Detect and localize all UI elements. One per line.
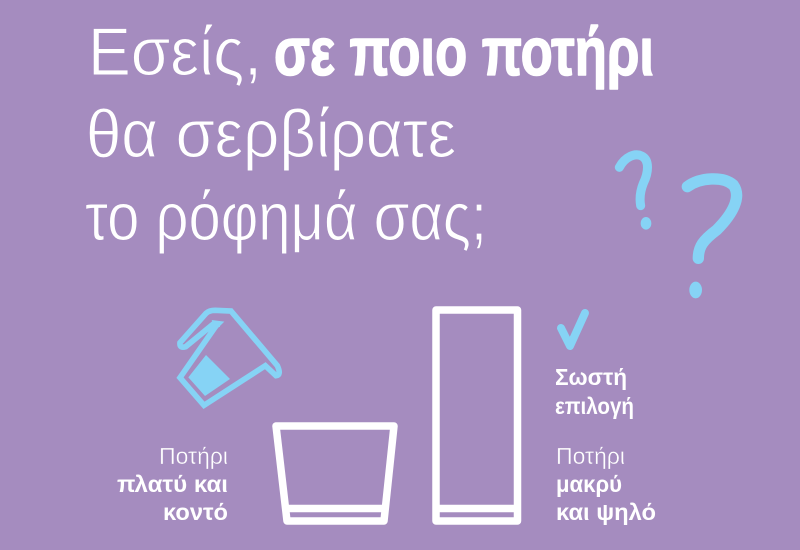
label: short glass: κοντό xyxy=(163,499,228,525)
label: short glass xyxy=(117,443,228,525)
label: tall glass: μακρύ xyxy=(556,471,622,497)
title: Εσείς, xyxy=(88,14,262,90)
icon: tall glass xyxy=(436,310,518,521)
icon: check mark xyxy=(561,313,585,346)
icon: small question mark xyxy=(619,155,651,230)
label: correct choice: επιλογή xyxy=(555,393,634,419)
title: θα σερβίρατε xyxy=(86,96,456,172)
label: correct choice: Σωστή xyxy=(555,364,627,390)
icon: short wide glass xyxy=(276,426,394,521)
icon: pouring jug xyxy=(180,310,279,405)
title: σε ποιο ποτήρι xyxy=(274,14,654,90)
title: το ρόφημά σας; xyxy=(85,179,487,255)
label: tall glass xyxy=(556,443,656,525)
label: short glass: Ποτήρι xyxy=(159,443,228,469)
label: tall glass: Ποτήρι xyxy=(556,443,625,469)
icon: large question mark xyxy=(687,179,737,298)
label: tall glass: και ψηλό xyxy=(556,499,656,525)
label: short glass: πλατύ και xyxy=(117,471,228,497)
title xyxy=(85,14,654,255)
label: correct choice xyxy=(555,364,634,419)
